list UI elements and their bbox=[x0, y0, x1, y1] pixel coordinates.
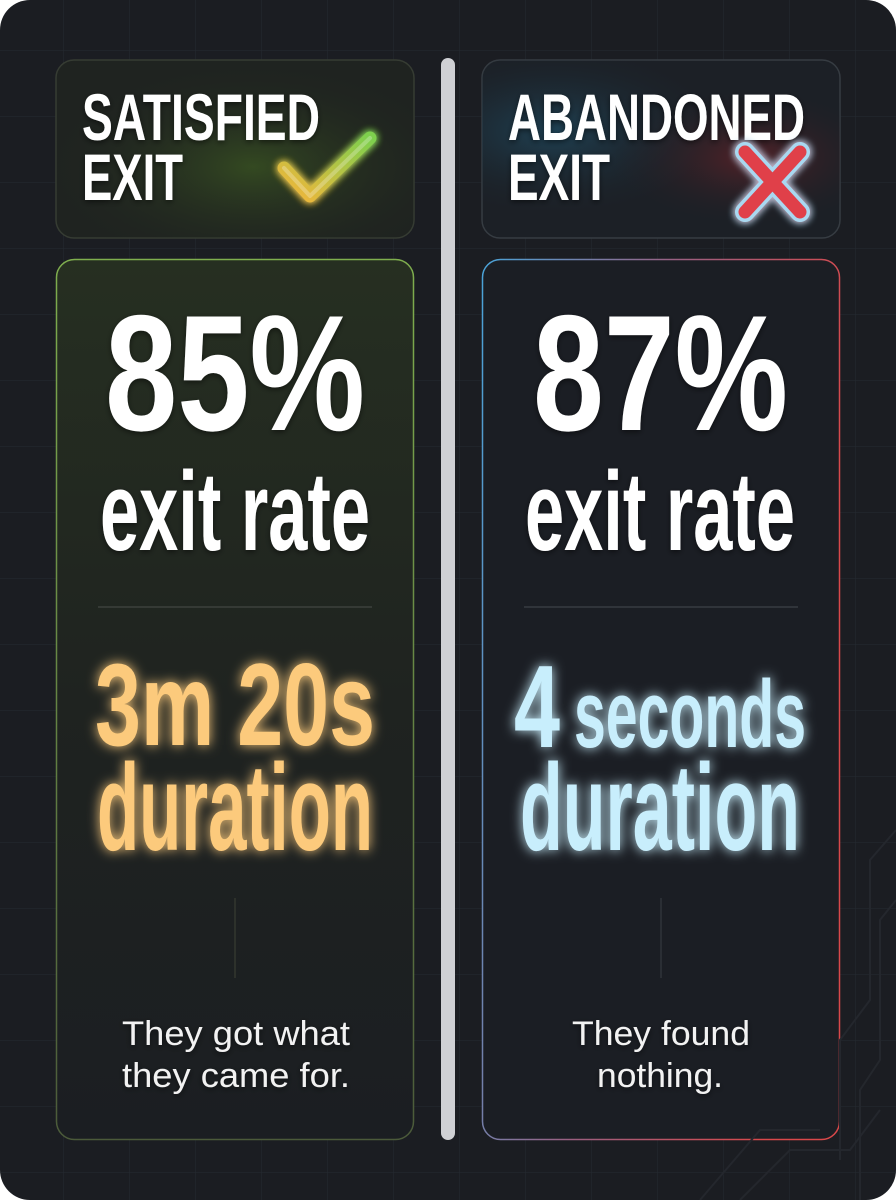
heading: satisfied exit: EXIT bbox=[82, 140, 183, 214]
panel: abandoned header bbox=[482, 60, 840, 238]
text: they got what they came for: They got what bbox=[122, 1015, 351, 1053]
panel: satisfied header bbox=[56, 60, 414, 238]
heading: satisfied exit bbox=[82, 80, 320, 214]
text: they found nothing: nothing. bbox=[597, 1057, 723, 1095]
text: they found nothing: They found bbox=[572, 1015, 750, 1053]
text: they got what they came for bbox=[122, 1015, 351, 1095]
stat: 3m 20s duration: 3m 20s bbox=[95, 639, 375, 770]
decoration: circuit lines bbox=[700, 830, 896, 1200]
stat: 85% exit rate: 85% bbox=[105, 281, 365, 465]
heading: abandoned exit: EXIT bbox=[508, 140, 610, 214]
text: they got what they came for: they came for. bbox=[122, 1057, 350, 1095]
heading: abandoned exit bbox=[508, 80, 805, 214]
stat: 85% exit rate bbox=[100, 281, 370, 574]
stat: 3m 20s duration: duration bbox=[97, 740, 373, 877]
stat: 87% exit rate bbox=[525, 281, 795, 574]
icon: check mark bbox=[284, 138, 370, 196]
stat: 4 seconds duration bbox=[514, 641, 806, 877]
stat: 4 seconds duration: 4 bbox=[514, 641, 560, 772]
stat: 85% exit rate: exit rate bbox=[100, 449, 370, 574]
text: they found nothing bbox=[572, 1015, 750, 1095]
stat: 3m 20s duration bbox=[95, 639, 375, 877]
divider bbox=[441, 58, 455, 1140]
stat: 87% exit rate: 87% bbox=[533, 281, 788, 465]
icon: icy cross bbox=[745, 152, 800, 212]
heading: satisfied exit: SATISFIED bbox=[82, 80, 320, 154]
panel: abandoned card bbox=[482, 260, 840, 1140]
panel: satisfied card bbox=[56, 260, 414, 1140]
